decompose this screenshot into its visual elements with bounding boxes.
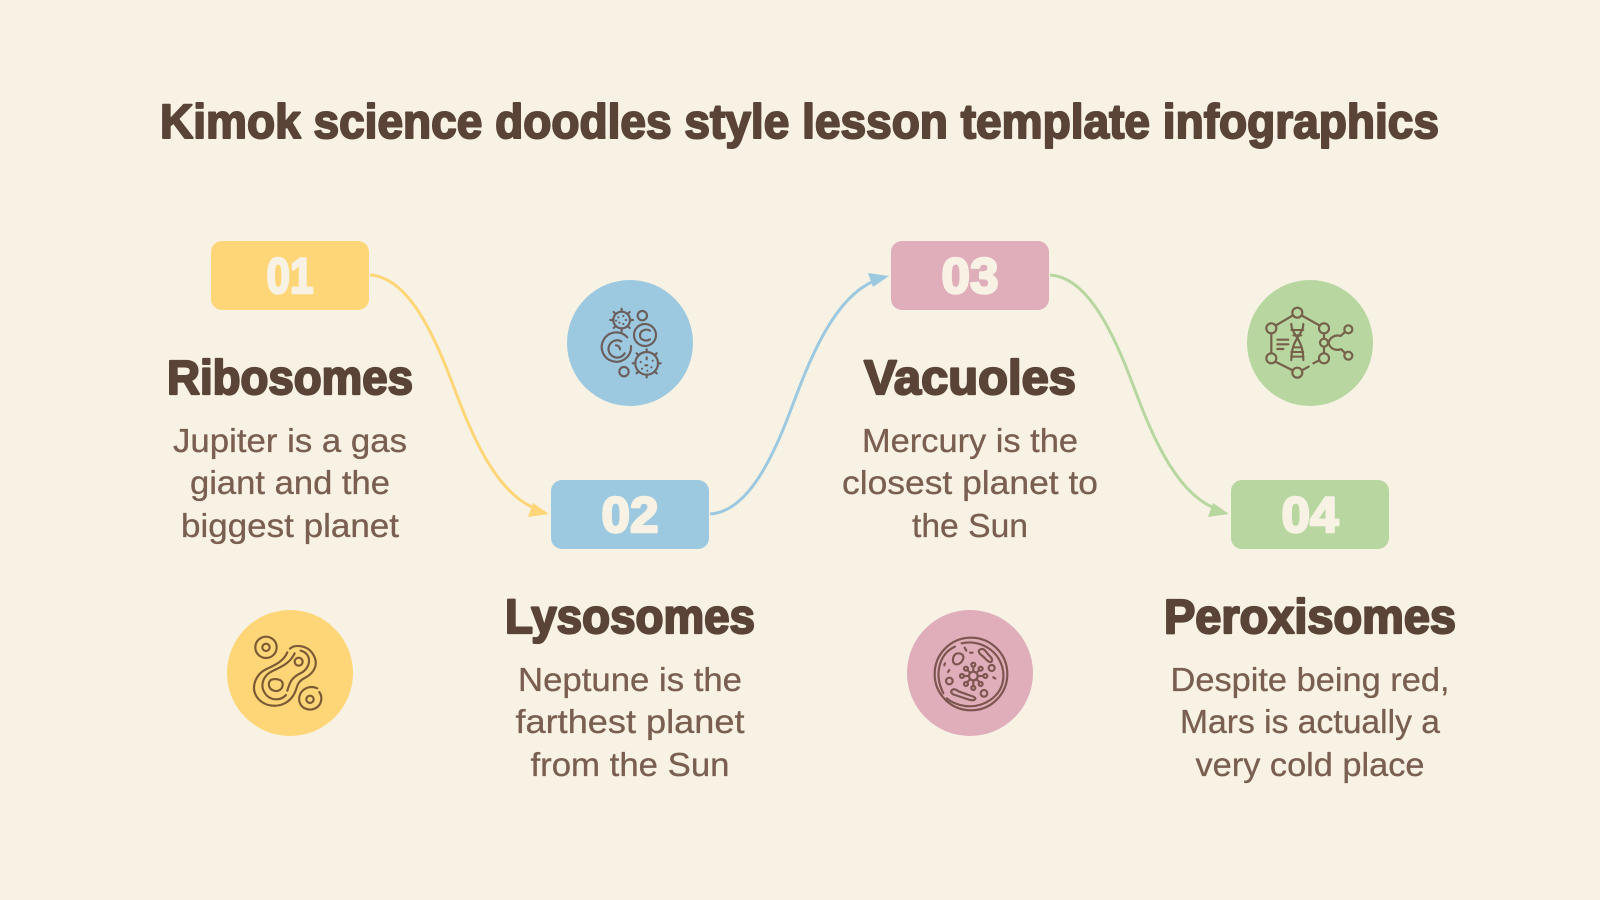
heading: Lysosomes: Lysosomes [505, 591, 755, 644]
panel: step 04 Peroxisomes [1164, 280, 1456, 783]
text: Ribosomes description: Jupiter is a gas [173, 422, 407, 459]
panel: step 03 Vacuoles [842, 241, 1098, 736]
text: Lysosomes description: Neptune is the [518, 661, 742, 698]
text: Vacuoles description: the Sun [912, 507, 1028, 544]
text: Ribosomes description: giant and the [190, 464, 390, 501]
text: Peroxisomes description: very cold place [1196, 746, 1424, 783]
panel: step 02 Lysosomes [505, 280, 755, 783]
text: Ribosomes description [173, 422, 407, 544]
heading: Peroxisomes: Peroxisomes [1164, 591, 1456, 644]
icon: DNA network in green circle [1247, 280, 1373, 406]
badge 02: 02 [602, 487, 658, 543]
panel: step 01 Ribosomes [167, 241, 413, 736]
icon: cell in pink circle [907, 610, 1033, 736]
arrow: 02 to 03 [710, 273, 889, 514]
heading: Ribosomes: Ribosomes [167, 352, 413, 405]
badge 02 [551, 480, 709, 549]
text: Peroxisomes description: Despite being red, [1170, 661, 1450, 698]
icon: cells in yellow circle [227, 610, 353, 736]
text: Lysosomes description: farthest planet [516, 703, 744, 740]
badge 01 [211, 241, 369, 310]
text: Peroxisomes description: Mars is actually a [1180, 703, 1441, 740]
arrow: 01 to 02 [370, 275, 549, 517]
text: Lysosomes description [516, 661, 744, 783]
badge 03 [891, 241, 1049, 310]
badge 04: 04 [1282, 487, 1339, 543]
title: Kimok science doodles style lesson template infographics [160, 96, 1439, 149]
text: Lysosomes description: from the Sun [530, 746, 730, 783]
text: Ribosomes description: biggest planet [181, 507, 399, 544]
icon: viruses in blue circle [567, 280, 693, 406]
text: Peroxisomes description [1170, 661, 1450, 783]
text: Vacuoles description: Mercury is the [862, 422, 1078, 459]
badge 04 [1231, 480, 1389, 549]
heading: Vacuoles: Vacuoles [864, 352, 1076, 405]
text: Vacuoles description: closest planet to [842, 464, 1098, 501]
arrow: 03 to 04 [1050, 275, 1229, 517]
badge 01: 01 [266, 248, 314, 304]
text: Vacuoles description [842, 422, 1098, 544]
badge 03: 03 [942, 248, 998, 304]
